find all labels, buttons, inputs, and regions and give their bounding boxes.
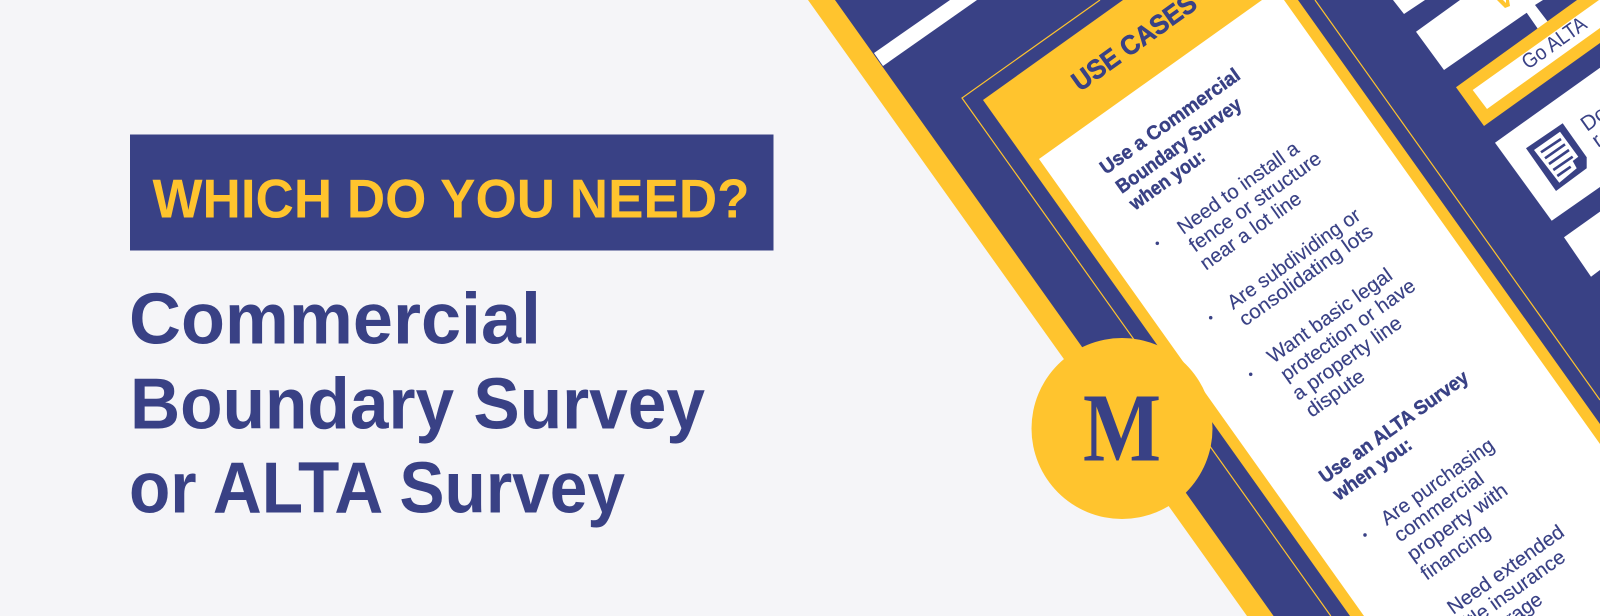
thin gold frame right (1315, 0, 1600, 400)
commercial boundary survey bullet list: dispute (1302, 365, 1369, 422)
small white card top right (1393, 0, 1425, 14)
panel: use cases (983, 0, 1600, 616)
heading banner: which do you need (130, 134, 774, 250)
commercial boundary survey bullet list: a property line (1288, 312, 1406, 405)
document card (1495, 68, 1600, 221)
thin gold frame left (962, 0, 1331, 616)
logo badge: M: M (1083, 375, 1161, 482)
commercial boundary survey bullet list: Want basic legal (1263, 264, 1397, 368)
document outer yellow border (808, 0, 1600, 616)
commercial boundary survey bullet list: consolidating lots (1235, 221, 1377, 331)
large white card top right (1416, 0, 1548, 70)
commercial boundary survey bullet list (1156, 137, 1420, 422)
commercial boundary survey subheading: Boundary Survey (1112, 94, 1246, 198)
title: commercial boundary survey or ALTA survey: Boundary Survey (130, 364, 705, 444)
commercial boundary survey bullet list: fence or structure (1185, 148, 1326, 257)
document card text (1577, 102, 1600, 152)
white stripe top left (874, 0, 977, 66)
document navy background (835, 0, 1600, 616)
ALTA survey bullet list: property with (1403, 479, 1512, 566)
go ALTA callout: Go ALTA (1518, 12, 1591, 74)
commercial boundary survey bullet list: Are subdividing or (1223, 204, 1365, 314)
commercial boundary survey bullet list: Need to install a (1173, 137, 1304, 239)
commercial boundary survey bullet list: near a lot line (1196, 188, 1306, 275)
go ALTA callout (1456, 0, 1600, 126)
title: commercial boundary survey or ALTA survey: Commercial (129, 279, 541, 359)
title: commercial boundary survey or ALTA survey (129, 279, 705, 529)
tilted document preview (808, 0, 1600, 616)
title: commercial boundary survey or ALTA survey: or ALTA Survey (129, 449, 625, 529)
ALTA survey subheading: Use an ALTA Survey (1315, 366, 1473, 488)
commercial boundary survey subheading: Use a Commercial (1096, 64, 1245, 179)
ALTA survey bullet list: Are purchasing (1377, 434, 1499, 530)
panel white body (1039, 0, 1600, 616)
panel yellow header and border (983, 0, 1600, 616)
logo badge: M (1032, 338, 1212, 519)
yellow heading fragment (1497, 0, 1510, 8)
ALTA survey subheading: when you: (1328, 434, 1417, 506)
ALTA survey bullet list: commercial (1390, 468, 1488, 547)
lower white card right (1564, 212, 1600, 277)
icon: document (1526, 123, 1587, 191)
commercial boundary survey subheading: when you: (1124, 146, 1210, 215)
commercial boundary survey bullet list: protection or have (1277, 275, 1420, 386)
ALTA survey bullet list (1363, 434, 1570, 616)
ALTA survey bullet list: financing (1417, 520, 1495, 585)
heading banner: which do you need: WHICH DO YOU NEED? (152, 168, 750, 230)
